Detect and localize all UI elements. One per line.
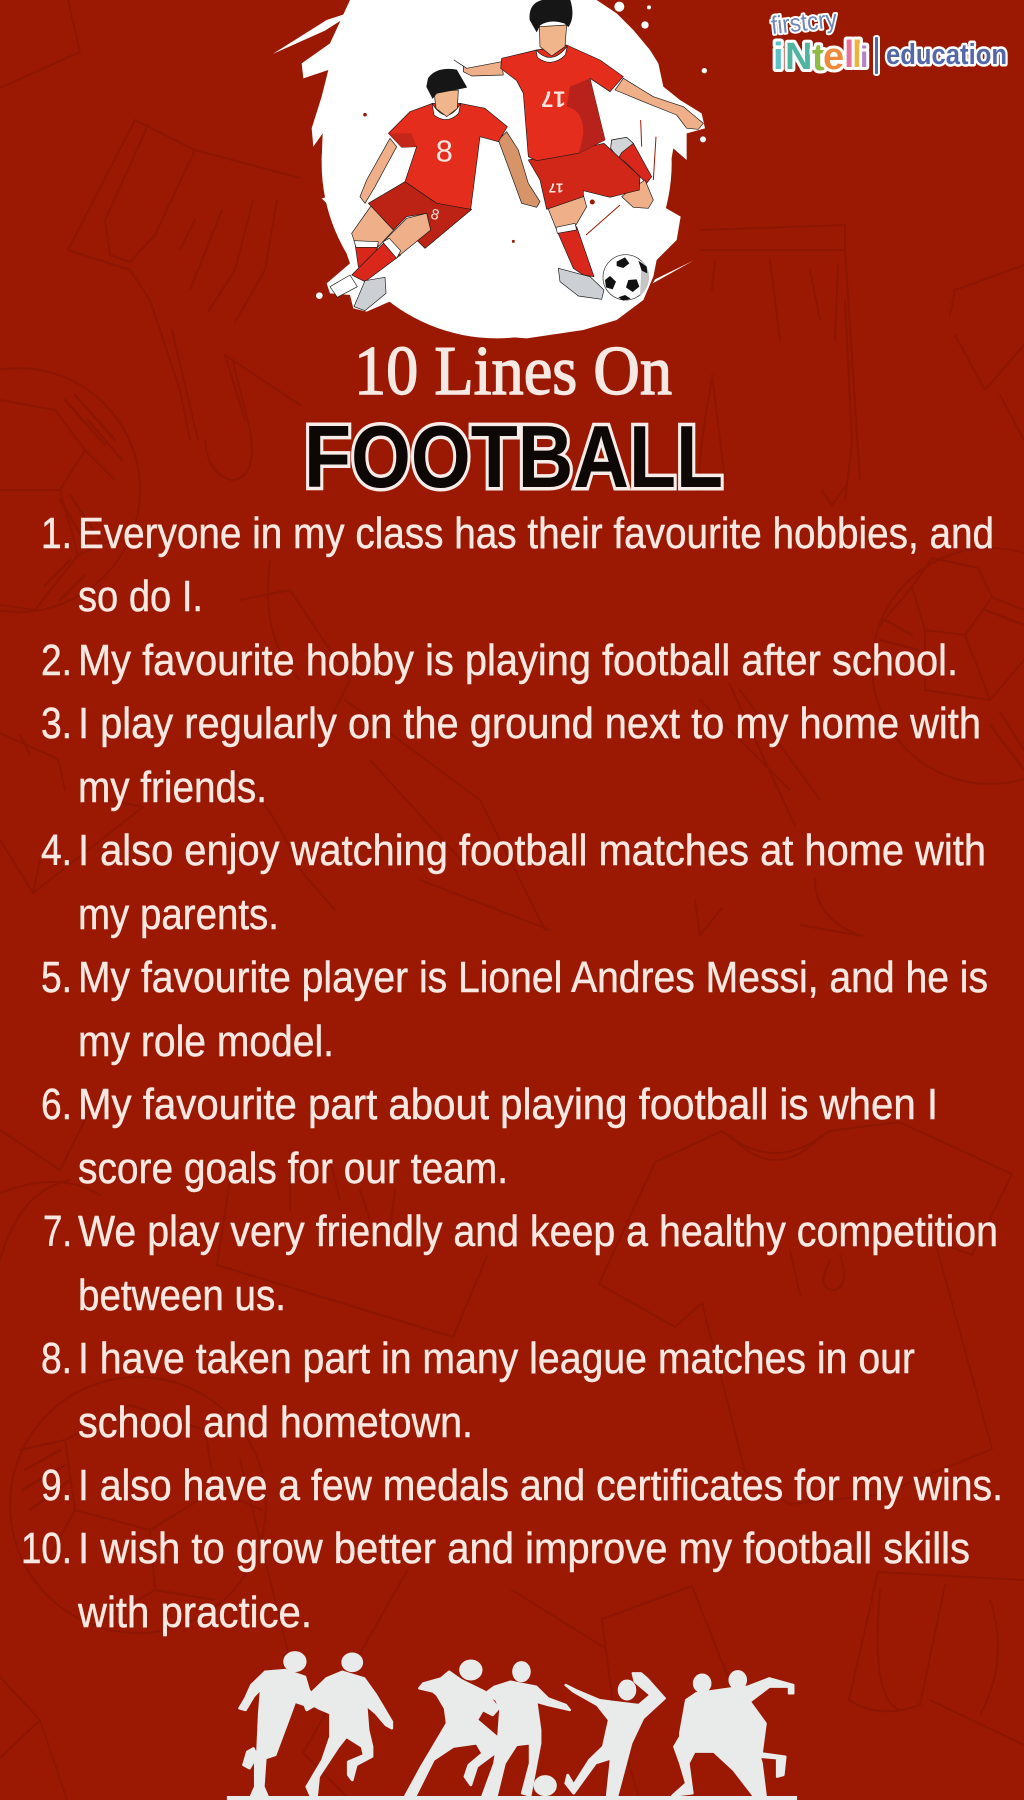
jersey number 8: 8	[436, 134, 453, 168]
grass strip	[227, 1796, 797, 1800]
title: FOOTBALL: FOOTBALL	[304, 407, 723, 506]
line 7: 7.	[43, 1207, 72, 1256]
line 6: score goals for our team.	[78, 1144, 508, 1193]
line 1	[41, 509, 994, 621]
silhouette: tacklers with ball	[406, 1661, 570, 1796]
shorts number 8: 8	[429, 207, 441, 224]
player number 17	[454, 0, 703, 299]
intelli wordmark: l	[852, 34, 863, 76]
white brush splash	[273, 0, 707, 338]
line 6	[41, 1080, 938, 1193]
line 4	[41, 826, 986, 939]
line 8: 8.	[41, 1334, 72, 1383]
line 8: school and hometown.	[78, 1398, 473, 1447]
line 10: with practice.	[77, 1588, 312, 1637]
firstcry intelli education logo	[770, 5, 1007, 79]
soccer ball	[603, 255, 649, 301]
line 1: 1.	[41, 509, 72, 558]
line 3: 3.	[41, 699, 72, 748]
line 8	[41, 1334, 915, 1447]
education wordmark: education	[886, 39, 1007, 71]
silhouette: kicker	[566, 1673, 665, 1796]
line 10	[21, 1524, 970, 1637]
intelli wordmark: N	[785, 36, 812, 78]
firstcry wordmark: firstcry	[770, 5, 839, 40]
numbered list	[21, 509, 1003, 1637]
line 1: so do I.	[78, 572, 203, 621]
shorts number 17: 17	[549, 180, 563, 195]
intelli wordmark: l	[844, 34, 855, 76]
silhouette: challengers	[673, 1671, 793, 1796]
line 3: my friends.	[78, 763, 267, 812]
player illustration with white brush splash	[273, 0, 707, 338]
logo divider	[874, 36, 879, 75]
intelli wordmark	[773, 34, 868, 79]
line 6: 6.	[41, 1080, 72, 1129]
line 3	[41, 699, 981, 812]
line 4: 4.	[41, 826, 72, 875]
line 5	[41, 953, 988, 1066]
intelli wordmark: i	[773, 36, 784, 78]
title: 10 Lines On: 10 Lines On	[354, 333, 672, 410]
line 4: my parents.	[78, 890, 279, 939]
line 9: 9.	[41, 1461, 72, 1510]
footer silhouettes of footballers	[227, 1652, 797, 1800]
line 10: 10.	[21, 1524, 72, 1573]
line 5: my role model.	[78, 1017, 334, 1066]
line 8: I have taken part in many league matches in our	[78, 1334, 915, 1383]
line 6: My favourite part about playing football is when I	[78, 1080, 938, 1129]
line 5: 5.	[41, 953, 72, 1002]
intelli wordmark: t	[812, 37, 825, 79]
jersey number 17: 17	[541, 86, 566, 111]
player number 8	[330, 69, 540, 311]
line 2: My favourite hobby is playing football after school.	[78, 636, 958, 685]
intelli wordmark: i	[860, 41, 868, 74]
intelli wordmark: e	[823, 36, 844, 78]
line 7	[43, 1207, 998, 1320]
line 7: between us.	[78, 1271, 286, 1320]
silhouette: runners	[240, 1652, 392, 1796]
line 2: 2.	[41, 636, 72, 685]
